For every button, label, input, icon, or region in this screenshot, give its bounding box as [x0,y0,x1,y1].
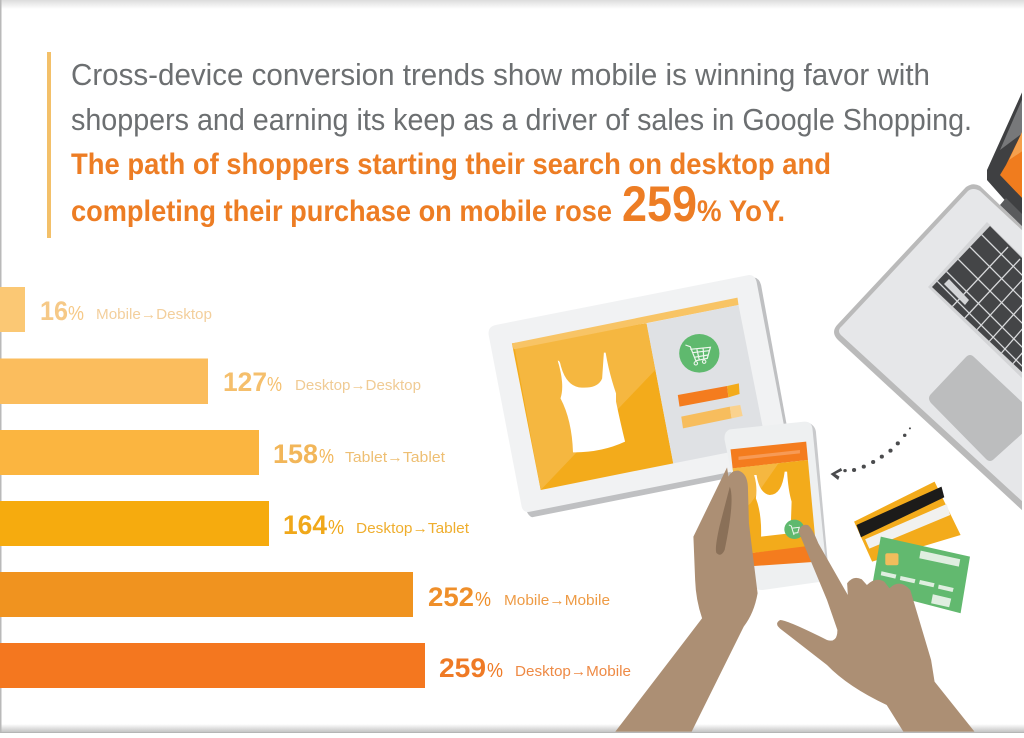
yellow card [854,482,961,562]
bar: Desktop to Mobile: 259 [439,653,486,683]
tablet header strip [512,298,739,349]
tablet shadow [527,277,794,517]
phone tank top [754,472,792,537]
laptop base [834,184,1024,512]
bar: Tablet to Tablet: 158 [273,439,318,469]
icon: left hand [615,467,758,732]
bar: Desktop to Desktop: % [267,374,282,396]
bar: Desktop to Mobile [0,643,631,688]
bar: Mobile to Mobile: Mobile→Mobile [504,592,610,609]
bar: Mobile to Desktop: % [68,303,84,325]
bar: Desktop to Tablet: 164 [283,510,327,540]
bar: Desktop to Mobile: Desktop→Mobile [515,663,631,680]
headline text: shoppers and earning its keep as a driver of sales in Google Shopping. [71,102,972,137]
icon: credit cards [854,482,970,613]
laptop screen [987,92,1022,214]
icon: smartphone [724,422,829,590]
bar: Mobile to Mobile [0,572,610,617]
bar: Tablet to Tablet: Tablet→Tablet [345,449,446,466]
bar: Mobile to Mobile: 252 [428,582,474,612]
phone body [724,422,827,590]
headline text: % YoY. [697,195,785,228]
icon: tablet [489,275,794,517]
icon: right hand [777,525,974,732]
cart badge [679,334,719,373]
illustration: devices and hands [489,275,974,732]
trackpad [929,355,1024,461]
bar: Mobile to Desktop: 16 [40,296,68,326]
header accent bar [47,52,51,238]
bar: Desktop to Desktop [0,358,421,404]
bar: Desktop to Mobile: % [487,660,503,682]
headline text: completing their purchase on mobile rose [71,195,612,228]
bar: Mobile to Desktop [0,287,212,332]
phone footer [750,545,818,566]
phone cart badge [784,520,804,539]
bar: Desktop to Tablet: Desktop→Tablet [356,520,470,537]
icon: laptop [834,88,1024,512]
headline text: 259 [622,176,697,232]
phone shadow [808,423,829,583]
phone screen [733,460,816,553]
headline text: The path of shoppers starting their search on desktop and [71,148,831,181]
tablet buttons [678,383,743,428]
bar: Tablet to Tablet [0,430,446,475]
bar: Desktop to Desktop: Desktop→Desktop [295,377,421,394]
keyboard [928,222,1024,380]
green card [871,537,970,613]
bar: Desktop to Tablet [0,501,470,546]
bar: Desktop to Desktop: 127 [223,367,267,397]
arrow: desktop to mobile [830,427,911,480]
bar: Tablet to Tablet: % [319,446,334,468]
phone header [731,442,808,468]
bar: Mobile to Mobile: % [475,589,491,611]
bar chart [0,287,631,688]
tablet body [489,275,791,512]
headline text [71,57,972,232]
tablet screen image panel [512,323,673,490]
headline text: Cross-device conversion trends show mobile is winning favor with [71,57,930,92]
bar: Mobile to Desktop: Mobile→Desktop [96,306,212,323]
tank top [558,353,625,452]
tablet side panel [647,305,766,463]
bar: Desktop to Tablet: % [328,517,344,539]
